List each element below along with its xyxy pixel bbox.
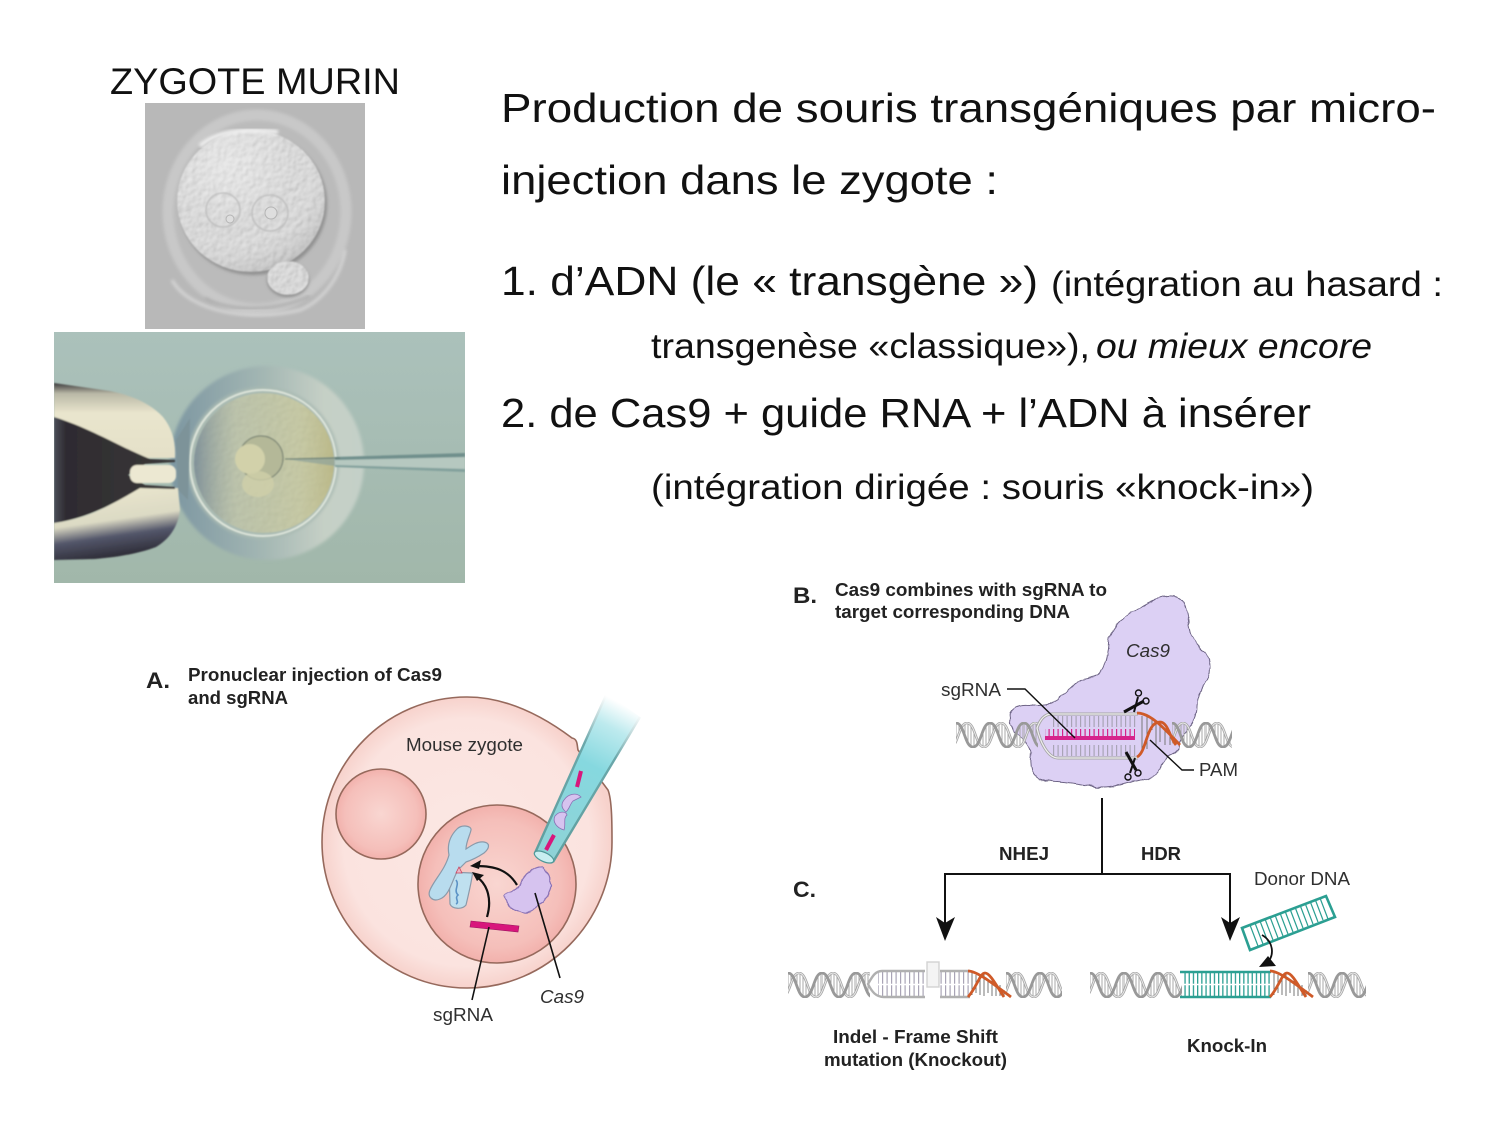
label: NHEJ: NHEJ bbox=[999, 844, 1049, 864]
leader lines bbox=[472, 893, 560, 1000]
injection needle bbox=[285, 453, 465, 472]
panel A heading: and sgRNA bbox=[188, 688, 288, 708]
panel A heading: A. bbox=[146, 668, 170, 693]
text block: item 1: ou mieux encore bbox=[1096, 327, 1372, 366]
left pronucleus bbox=[336, 769, 426, 859]
DNA helix right bbox=[1172, 722, 1232, 748]
photo: mouse zygote under DIC microscopy bbox=[145, 103, 365, 329]
curved insertion arrow bbox=[1262, 935, 1272, 962]
label: PAM with leader bbox=[1150, 740, 1238, 780]
scissors bottom bbox=[1125, 752, 1141, 780]
label: C: C. bbox=[793, 877, 816, 902]
DNA outcome: indel bbox=[788, 962, 1062, 998]
donor DNA bbox=[1242, 896, 1335, 967]
label: sgRNA with leader bbox=[941, 680, 1075, 738]
sgRNA strand bbox=[1045, 729, 1135, 740]
cytoplasm bbox=[190, 390, 336, 536]
text block: item 1: (intégration au hasard : bbox=[1051, 265, 1443, 304]
text block: item 2: (intégration dirigée : souris «knock-in») bbox=[651, 468, 1314, 507]
panel A heading bbox=[146, 665, 442, 708]
chromosome bbox=[429, 826, 488, 908]
panel B heading bbox=[793, 580, 1107, 622]
text block: item 1: transgenèse «classique»), bbox=[651, 327, 1090, 366]
label: sgRNA with leader: sgRNA bbox=[941, 680, 1001, 700]
DNA outcome: knock-in bbox=[1090, 971, 1366, 998]
label: HDR: HDR bbox=[1141, 844, 1181, 864]
panel B: Cas9 with sgRNA on DNA bbox=[793, 580, 1238, 788]
label: Cas9: Cas9 bbox=[540, 987, 584, 1007]
text block: item 1 bbox=[501, 258, 1443, 366]
label: indel outcome bbox=[824, 1027, 1007, 1070]
panel B heading: Cas9 combines with sgRNA to bbox=[835, 580, 1107, 600]
holding pipette bbox=[54, 383, 190, 560]
label: PAM with leader: PAM bbox=[1199, 760, 1238, 780]
label: knock-in outcome: Knock-In bbox=[1187, 1036, 1267, 1056]
zona pellucida bbox=[170, 366, 364, 560]
pronuclei bbox=[235, 436, 283, 497]
injection pipette bbox=[533, 693, 640, 866]
label: donor DNA: Donor DNA bbox=[1254, 869, 1350, 889]
Cas9 protein blob bbox=[503, 867, 552, 913]
photo: micro-injection of a zygote bbox=[54, 332, 465, 583]
text block: item 1: 1. d’ADN (le « transgène ») bbox=[501, 258, 1038, 304]
panel A: pronuclear injection bbox=[146, 665, 640, 1025]
text block: item 2: 2. de Cas9 + guide RNA + l’ADN à insérer bbox=[501, 390, 1311, 436]
branching arrows NHEJ / HDR bbox=[936, 798, 1240, 941]
PAM region in orange bbox=[1137, 713, 1180, 757]
open DNA bubble bbox=[1037, 714, 1138, 758]
scissors top bbox=[1124, 690, 1149, 712]
heading: production de souris transgéniques: injection dans le zygote : bbox=[501, 157, 998, 203]
Cas9 protein bbox=[1009, 596, 1210, 788]
DNA helix left bbox=[956, 722, 1038, 748]
label: sgRNA: sgRNA bbox=[433, 1005, 493, 1025]
panel B heading: B. bbox=[793, 583, 817, 608]
panel A heading: Pronuclear injection of Cas9 bbox=[188, 665, 442, 685]
right pronucleus bbox=[418, 805, 576, 963]
label: mouse zygote: Mouse zygote bbox=[406, 735, 523, 755]
arrows to chromosome bbox=[470, 860, 517, 917]
heading: production de souris transgéniques: Production de souris transgéniques par micro- bbox=[501, 85, 1436, 131]
label: zygote murin: ZYGOTE MURIN bbox=[110, 61, 400, 102]
sgRNA bar bbox=[470, 921, 519, 932]
panel B heading: target corresponding DNA bbox=[835, 602, 1070, 622]
mouse zygote cell bbox=[322, 697, 612, 988]
label: Cas9: Cas9 bbox=[1126, 641, 1170, 661]
text block: item 2 bbox=[501, 390, 1314, 507]
label: indel outcome: Indel - Frame Shift bbox=[833, 1027, 998, 1047]
label: indel outcome: mutation (Knockout) bbox=[824, 1050, 1007, 1070]
heading: production de souris transgéniques bbox=[501, 85, 1436, 203]
